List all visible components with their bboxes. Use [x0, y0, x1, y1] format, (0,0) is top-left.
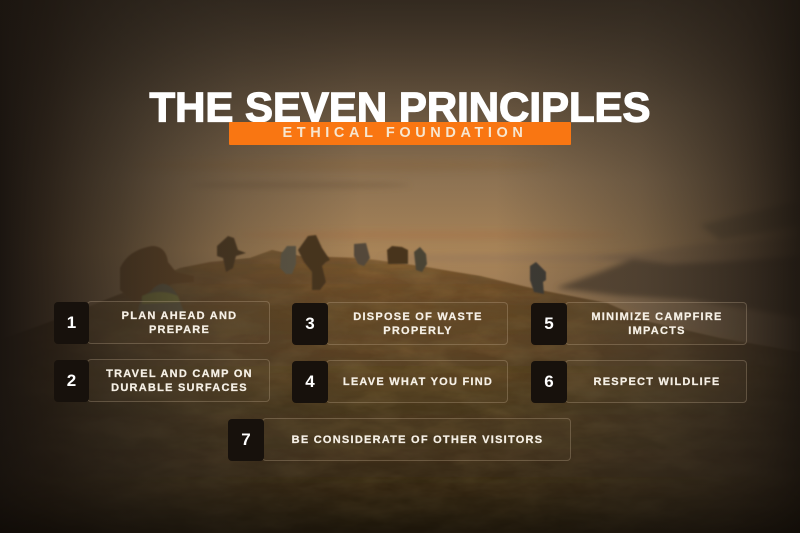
principle 7: 7	[241, 430, 251, 449]
principle 1: PLAN AHEAD AND	[122, 310, 237, 322]
principle 3: DISPOSE OF WASTE	[353, 311, 483, 323]
principle 5: 5	[544, 314, 554, 333]
hikers 6	[387, 246, 408, 264]
principle 3: 3	[305, 314, 315, 333]
mountain slope	[0, 250, 800, 533]
principle 7: BE CONSIDERATE OF OTHER VISITORS	[292, 434, 543, 446]
principle 5: MINIMIZE CAMPFIRE	[591, 311, 723, 323]
principle 1	[54, 301, 270, 344]
principle 3	[292, 302, 508, 345]
principle 5: IMPACTS	[628, 324, 686, 336]
title: THE SEVEN PRINCIPLES	[150, 84, 650, 130]
hiker 2	[217, 236, 246, 272]
hikers	[120, 235, 546, 312]
principle 7	[228, 418, 571, 461]
principle 2: 2	[67, 371, 76, 390]
principle 2: DURABLE SURFACES	[111, 382, 248, 394]
subtitle banner	[229, 122, 571, 145]
hiker 5	[354, 243, 370, 266]
principle 2	[54, 359, 270, 402]
principle 6: 6	[544, 372, 554, 391]
principle 4	[292, 360, 508, 403]
hiker 8	[530, 262, 546, 294]
principle 6: RESPECT WILDLIFE	[594, 376, 720, 388]
hiker 3	[280, 246, 296, 274]
principle 4: LEAVE WHAT YOU FIND	[343, 376, 493, 388]
large foreground hiker	[120, 246, 194, 302]
hiker 4	[298, 235, 330, 290]
principle 4: 4	[305, 372, 315, 391]
principle 2: TRAVEL AND CAMP ON	[106, 368, 253, 380]
principle 6	[531, 360, 747, 403]
principle 3: PROPERLY	[383, 324, 453, 336]
principle 5	[531, 302, 747, 345]
principle 1: 1	[67, 313, 76, 332]
subtitle banner: ETHICAL FOUNDATION	[282, 125, 527, 141]
hiker 7	[414, 247, 427, 272]
principle 1: PREPARE	[149, 324, 210, 336]
